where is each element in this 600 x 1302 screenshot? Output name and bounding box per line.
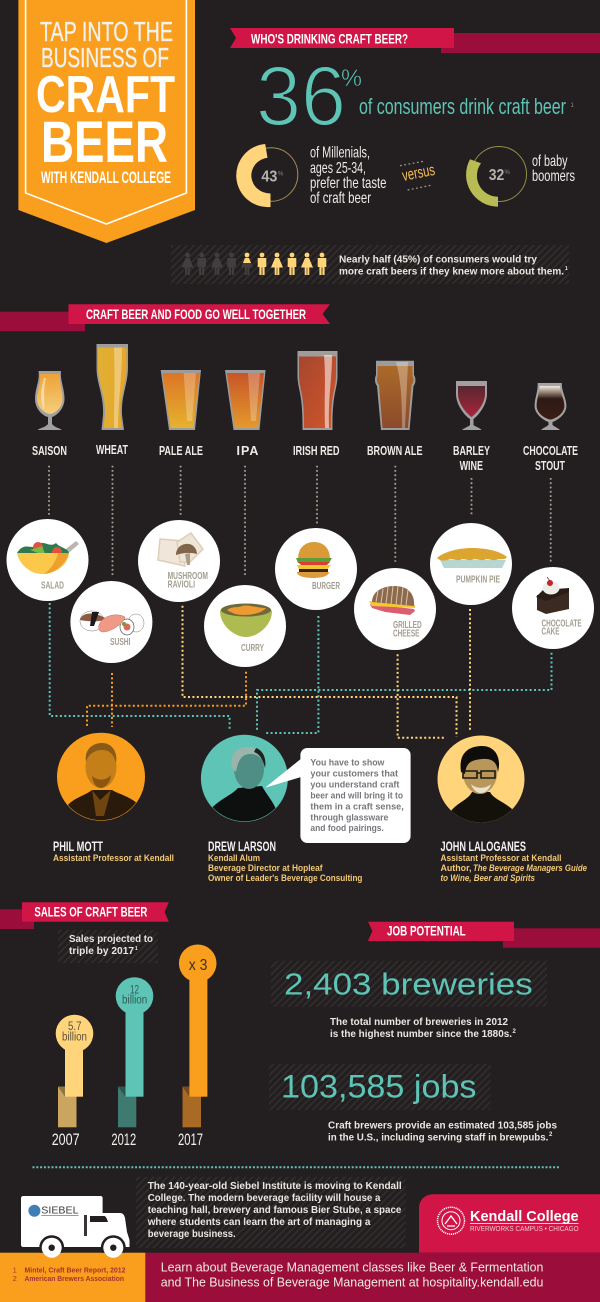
quote bubble: you understand craft [310, 780, 400, 791]
ribbon: craft beer and food [0, 304, 330, 331]
label: grilled cheese: CHEESE [393, 628, 420, 640]
donut: 43 percent millennials: % [278, 172, 284, 178]
bar: 2007: 2007 [52, 1131, 80, 1149]
text: baby boomers: of baby [532, 153, 568, 170]
ribbon: craft beer and food: CRAFT BEER AND FOOD GO WELL TOGETHER [86, 306, 306, 322]
panel: sources: Mintel, Craft Beer Report, 2012 [24, 1266, 126, 1275]
donut: 43 percent millennials: 43 [261, 169, 277, 186]
grey dotted connectors: beers to food [49, 466, 551, 577]
glass: Irish red [298, 351, 338, 430]
bar: 2017 [178, 944, 216, 1149]
label: mushroom ravioli [168, 571, 208, 590]
stat: breweries: The total number of breweries in 2012 [330, 1017, 508, 1028]
icon: Siebel truck [21, 1196, 130, 1260]
text: millennials: of craft beer [310, 190, 371, 207]
quote bubble [265, 748, 411, 843]
beer labels: STOUT [535, 459, 565, 473]
text: Siebel Institute [136, 1177, 406, 1248]
text: Siebel Institute: College. The modern beverage facility will house a [148, 1193, 381, 1204]
stat: 36 percent: 36 [256, 49, 346, 143]
title banner: BUSINESS OF [41, 42, 169, 73]
text: Siebel Institute: The 140-year-old Siebel Institute is moving to Kendall [148, 1181, 402, 1192]
text: sales projected: 1 [135, 946, 138, 952]
stat: 36 percent: 1 [570, 103, 574, 109]
text: sales projected: Sales projected to [69, 934, 153, 945]
text: Siebel Institute: where students can learn the art of managing a [147, 1217, 371, 1228]
panel: nearly half of consumers: more craft beers if they knew more about them. [339, 266, 564, 278]
icon: college seal [438, 1207, 464, 1234]
label: salad: SALAD [41, 581, 64, 592]
panel: Kendall College logo: RIVERWORKS CAMPUS • CHICAGO [470, 1226, 579, 1233]
label: pumpkin pie: PUMPKIN PIE [456, 575, 500, 586]
ribbon: job potential [368, 922, 600, 948]
caption: Drew Larson [208, 839, 363, 884]
label: sushi: SUSHI [110, 637, 131, 648]
panel: call to action: Learn about Beverage Management classes like Beer & Fermentation [161, 1260, 543, 1275]
caption: Drew Larson: DREW LARSON [208, 839, 276, 854]
bar: 2017: x 3 [189, 957, 207, 974]
text: sales projected: triple by 2017 [69, 946, 134, 957]
caption: Phil Mott: PHIL MOTT [53, 839, 104, 854]
food: chocolate cake [512, 567, 594, 649]
text: baby boomers: boomers [532, 168, 575, 185]
food: grilled cheese [354, 568, 436, 650]
bar: 2012: 2012 [111, 1131, 136, 1149]
label: chocolate cake [542, 618, 582, 638]
chart: sales bars [52, 944, 217, 1149]
caption: John Laloganes [440, 839, 588, 884]
title banner [18, 0, 195, 243]
panel: sources: 2 [13, 1274, 17, 1283]
text: baby boomers [532, 153, 575, 185]
food: mushroom ravioli [138, 520, 220, 602]
stat: jobs [269, 1064, 557, 1143]
panel: nearly half of consumers: Nearly half (45%) of consumers would try [339, 255, 537, 266]
glass: barley wine [456, 381, 487, 430]
stat: jobs: in the U.S., including serving staff in brewpubs. [328, 1132, 549, 1143]
food: burger [275, 528, 357, 610]
glass: chocolate stout [535, 383, 566, 430]
ribbon: sales of craft beer [0, 902, 169, 929]
beer labels: CHOCOLATE [523, 444, 578, 458]
quote bubble: and food pairings. [310, 823, 384, 834]
versus [400, 161, 436, 190]
label: grilled cheese [393, 620, 422, 640]
food: sushi [70, 581, 152, 663]
quote bubble: through glassware [310, 812, 388, 823]
donut: 32 percent baby boomers [466, 146, 526, 207]
versus: versus [401, 162, 436, 185]
beer labels [32, 443, 578, 473]
beer labels: WHEAT [96, 443, 128, 457]
caption: John Laloganes: to Wine, Beer and Spirits [440, 873, 535, 884]
panel: Kendall College logo: Kendall College [470, 1208, 579, 1225]
ribbon: sales of craft beer: SALES OF CRAFT BEER [34, 903, 147, 919]
glass: pale ale [161, 370, 201, 430]
panel: nearly half of consumers [171, 245, 569, 284]
text: millennials [310, 145, 387, 207]
panel: call to action: and The Business of Beverage Management at hospitality.kendall.edu [161, 1274, 543, 1289]
beer labels: IPA [236, 444, 259, 458]
stat: jobs: 2 [549, 1132, 553, 1138]
teal dotted divider [32, 1166, 560, 1168]
coloured dotted connectors: food to experts [50, 603, 551, 738]
food: curry [204, 585, 286, 667]
caption: Phil Mott: Assistant Professor at Kendall [53, 853, 174, 864]
label: chocolate cake: CAKE [542, 626, 560, 638]
bar: 2007: billion [62, 1032, 87, 1044]
ribbon: who's drinking craft beer: WHO'S DRINKING CRAFT BEER? [251, 30, 408, 46]
bar: 2012: 12 [130, 985, 139, 997]
title banner: TAP INTO THE [40, 16, 173, 47]
donut: 32 percent baby boomers: % [504, 170, 510, 176]
beer labels: IRISH RED [293, 444, 340, 458]
text: Siebel Institute: teaching hall, brewery and famous Bier Stube, a space [148, 1205, 402, 1216]
stat: 36 percent [256, 49, 574, 143]
logo: Siebel: SIEBEL [41, 1206, 79, 1216]
quote bubble: your customers that [310, 769, 399, 780]
glass: brown ale [375, 361, 415, 430]
caption: Drew Larson: Kendall Alum [208, 853, 260, 864]
label: mushroom ravioli: RAVIOLI [168, 580, 195, 590]
label: mushroom ravioli: MUSHROOM [168, 571, 208, 582]
stat: breweries: 2 [512, 1029, 516, 1035]
ribbon: job potential: JOB POTENTIAL [387, 922, 466, 938]
title banner: CRAFT [36, 66, 175, 124]
bar: 2007: 5.7 [68, 1021, 82, 1033]
caption: Drew Larson: Owner of Leader's Beverage Consulting [208, 873, 363, 884]
stat: breweries: 2,403 breweries [284, 966, 533, 1001]
stat: jobs: 103,585 jobs [281, 1069, 476, 1105]
beer labels: BROWN ALE [367, 444, 422, 458]
stat: jobs: Craft brewers provide an estimated 103,585 jobs [328, 1120, 557, 1131]
stat: 36 percent: % [341, 65, 362, 92]
label: curry: CURRY [241, 643, 264, 654]
beer labels: PALE ALE [159, 444, 203, 458]
label: grilled cheese: GRILLED [393, 620, 422, 631]
ribbon: who's drinking craft beer [230, 28, 600, 53]
beer labels: WINE [460, 459, 483, 473]
title banner: BEER [41, 110, 168, 175]
text: millennials: prefer the taste [310, 175, 387, 192]
panel: Kendall College logo [419, 1194, 600, 1253]
bar: 2012: billion [122, 994, 147, 1006]
quote bubble: them in a craft sense, [310, 801, 404, 812]
portrait: John Laloganes [438, 736, 524, 824]
bar: 2017: 2017 [178, 1131, 203, 1149]
donut: 43 percent millennials [236, 144, 298, 207]
glass: IPA [225, 370, 266, 430]
icons: people row [182, 253, 326, 275]
beer labels: SAISON [32, 444, 67, 458]
text: millennials: ages 25-34, [310, 160, 366, 177]
food: salad [6, 519, 88, 601]
portrait: Phil Mott [57, 733, 145, 822]
panel: sources: American Brewers Association [24, 1274, 124, 1283]
title banner: WITH KENDALL COLLEGE [41, 169, 171, 187]
text: sales projected [58, 930, 158, 963]
caption: John Laloganes: Author, [440, 863, 472, 874]
text: millennials: of Millenials, [310, 145, 370, 162]
label: burger: BURGER [312, 581, 340, 592]
quote bubble: You have to show [310, 758, 385, 769]
donut: 32 percent baby boomers: 32 [489, 167, 504, 184]
quote bubble: beer and will bring it to [310, 790, 403, 801]
stat: breweries [271, 961, 547, 1040]
glass: saison [35, 371, 64, 430]
portrait: Drew Larson [201, 735, 288, 822]
bar: 2012 [111, 977, 153, 1149]
panel: nearly half of consumers: 1 [565, 266, 568, 272]
panel: call to action [145, 1253, 600, 1302]
caption: Phil Mott [53, 839, 174, 864]
bar: 2007 [52, 1015, 93, 1149]
beer labels: BARLEY [453, 444, 490, 458]
caption: John Laloganes: JOHN LALOGANES [440, 839, 526, 854]
food: pumpkin pie [430, 523, 512, 605]
text: Siebel Institute: beverage business. [148, 1229, 236, 1240]
panel: sources [0, 1253, 145, 1302]
caption: Drew Larson: Beverage Director at Hopleaf [208, 863, 323, 874]
stat: breweries: is the highest number since the 1880s. [330, 1029, 512, 1040]
caption: John Laloganes: Assistant Professor at Kendall [440, 853, 562, 864]
panel: sources: 1 [13, 1266, 17, 1275]
glass: wheat [96, 344, 128, 430]
